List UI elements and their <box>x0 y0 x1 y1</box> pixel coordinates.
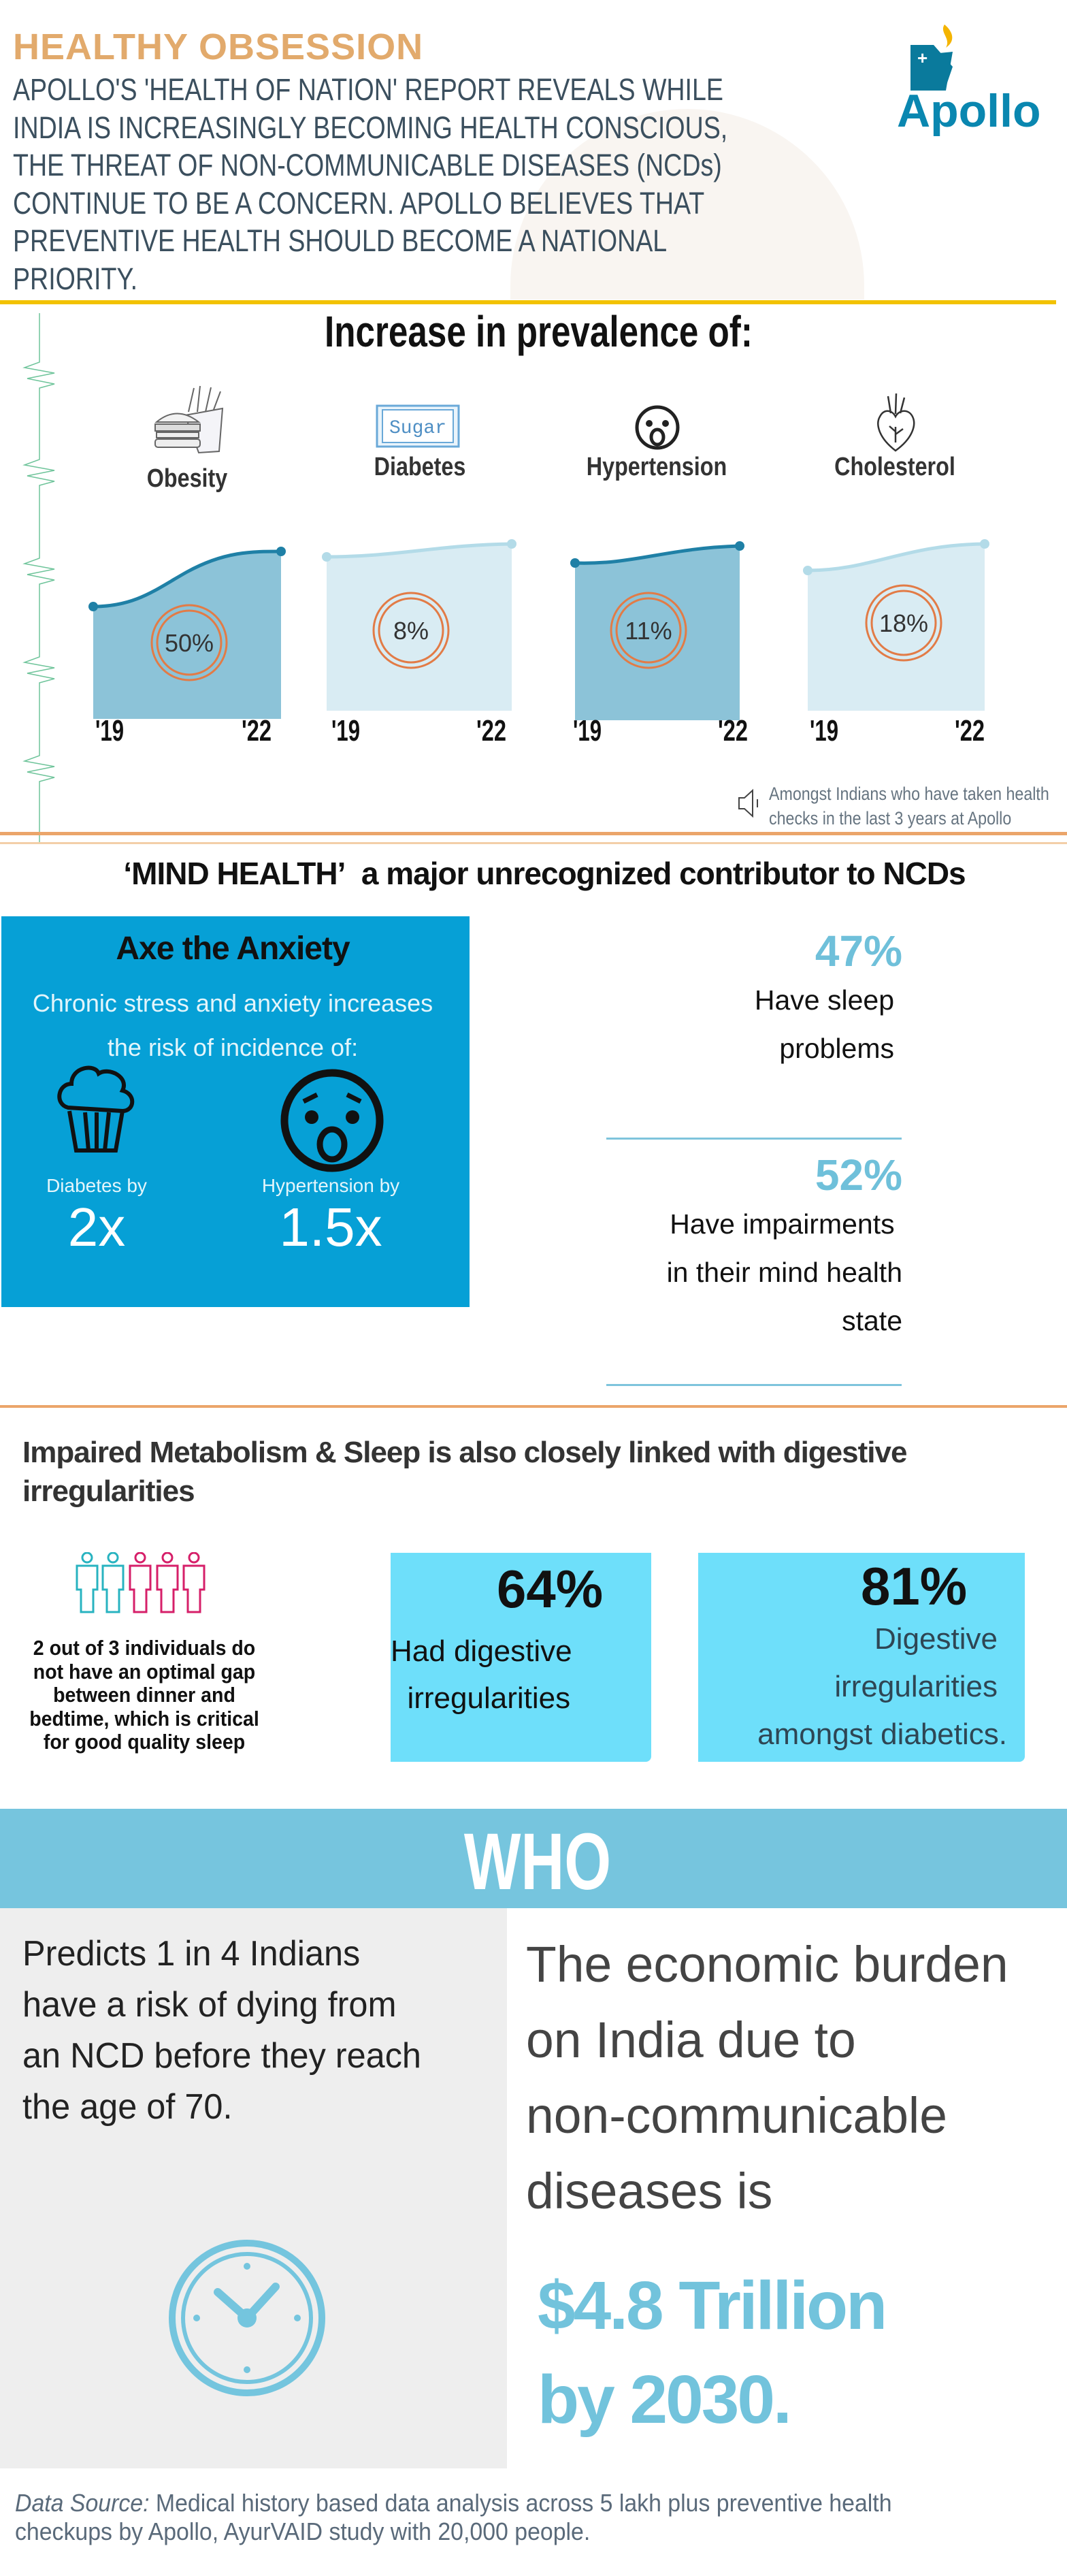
stat: 47% sleep: Have sleep <box>755 984 894 1016</box>
banner: WHO <box>0 1809 1067 1908</box>
stat: 52% mind health: in their mind health <box>667 1257 902 1288</box>
chart: area charts: '22 <box>242 714 272 747</box>
stat: 52% mind health <box>667 1150 902 1336</box>
panel text: the risk of incidence of: <box>108 1033 358 1061</box>
panel: WHO prediction: an NCD before they reach <box>22 2036 421 2076</box>
banner: WHO: WHO <box>464 1817 611 1907</box>
stat: $4.8 trillion <box>538 2268 885 2438</box>
stat: $4.8 trillion: by 2030. <box>538 2362 790 2438</box>
note <box>769 784 1049 828</box>
label: diabetes: Diabetes <box>374 453 465 481</box>
caption: 2 out of 3: 2 out of 3 individuals do <box>33 1636 255 1660</box>
caption: 2 out of 3: not have an optimal gap <box>33 1660 255 1683</box>
chart: area charts <box>88 539 989 747</box>
chart: area charts: '22 <box>718 714 748 747</box>
stat: hypertension 1.5x: Hypertension by <box>262 1175 399 1196</box>
panel: 64%: Had digestive <box>391 1635 572 1668</box>
chart: area charts: '22 <box>955 714 985 747</box>
footer: data source <box>15 2489 892 2545</box>
text: economic burden <box>526 1936 1008 2219</box>
panel: WHO prediction: Predicts 1 in 4 Indians <box>22 1934 360 1974</box>
intro paragraph: PRIORITY. <box>13 261 137 295</box>
panel: 81%: Digestive <box>874 1622 998 1656</box>
logo: Apollo <box>897 25 1041 136</box>
caption: 2 out of 3: bedtime, which is critical <box>29 1706 259 1730</box>
panel: 81% <box>698 1553 1025 1762</box>
stat: 52% mind health: Have impairments <box>670 1208 895 1240</box>
caption: 2 out of 3 <box>29 1636 259 1754</box>
caption: 2 out of 3: between dinner and <box>53 1683 235 1707</box>
icon: sugar: Sugar <box>389 418 446 439</box>
header background silhouette <box>510 109 864 300</box>
chart: area charts: 8% <box>393 617 429 645</box>
stat: hypertension 1.5x: 1.5x <box>279 1197 382 1257</box>
icon: muffin <box>57 1066 135 1153</box>
ekg line <box>22 313 54 842</box>
title: HEALTHY OBSESSION <box>13 27 423 67</box>
stat: 47% sleep <box>755 927 902 1064</box>
label: obesity: Obesity <box>147 464 227 493</box>
icon: heart <box>877 393 915 452</box>
label: hypertension: Hypertension <box>587 453 727 481</box>
heading: impaired metabolism <box>22 1436 906 1508</box>
orange dividers <box>0 832 1067 835</box>
chart: area charts: '19 <box>95 714 124 747</box>
chart: area charts: '22 <box>476 714 506 747</box>
note: Amongst Indians who have taken health <box>769 784 1049 804</box>
panel: WHO prediction <box>0 1908 507 2468</box>
chart: area charts: '19 <box>331 714 360 747</box>
intro paragraph: CONTINUE TO BE A CONCERN. APOLLO BELIEVES THAT <box>13 185 704 221</box>
stat: hypertension 1.5x <box>262 1175 399 1257</box>
note: checks in the last 3 years at Apollo <box>769 808 1011 828</box>
icon: people <box>76 1552 206 1613</box>
panel text <box>33 989 433 1061</box>
caption: 2 out of 3: for good quality sleep <box>44 1730 245 1754</box>
icon: clock <box>169 2240 325 2396</box>
icon: burger and fries <box>154 385 223 453</box>
intro paragraph: THE THREAT OF NON-COMMUNICABLE DISEASES (NCDs) <box>13 148 722 182</box>
panel text: Chronic stress and anxiety increases <box>33 989 433 1017</box>
intro paragraph <box>13 72 727 295</box>
chart: area charts: 11% <box>625 617 672 645</box>
chart: area charts: '19 <box>573 714 602 747</box>
logo: Apollo: Apollo <box>897 85 1041 136</box>
text: economic burden: The economic burden <box>526 1936 1008 1993</box>
footer: data source: Data Source: Medical history based data analysis across 5 lakh plus preventive health <box>15 2489 892 2517</box>
panel: 81%: irregularities <box>834 1670 998 1703</box>
yellow divider <box>0 300 1056 304</box>
text: economic burden: non-communicable <box>526 2087 947 2144</box>
icon: sugar <box>376 404 460 448</box>
panel: axe the anxiety <box>1 916 470 1307</box>
heading: mind health: ‘MIND HEALTH’ a major unrecognized contributor to NCDs <box>123 856 966 891</box>
chart: area charts: 50% <box>165 629 214 657</box>
chart: area charts: 18% <box>879 609 928 637</box>
heading: increase in prevalence: Increase in prevalence of: <box>325 307 753 356</box>
stat: diabetes 2x: Diabetes by <box>46 1175 147 1196</box>
logo: Apollo: + <box>917 48 928 68</box>
icon: speaker <box>738 788 758 818</box>
intro paragraph: APOLLO'S 'HEALTH OF NATION' REPORT REVEALS WHILE <box>13 72 723 107</box>
intro paragraph: INDIA IS INCREASINGLY BECOMING HEALTH CONSCIOUS, <box>13 110 727 144</box>
text: economic burden: on India due to <box>526 2012 856 2068</box>
footer: data source: checkups by Apollo, AyurVAID study with 20,000 people. <box>15 2517 590 2545</box>
panel: 81%: amongst diabetics. <box>757 1718 1007 1751</box>
label: cholesterol: Cholesterol <box>834 453 955 481</box>
panel: 64%: 64% <box>497 1559 603 1619</box>
stat: 52% mind health: state <box>842 1305 902 1336</box>
intro paragraph: PREVENTIVE HEALTH SHOULD BECOME A NATIONAL <box>13 223 667 258</box>
stat: diabetes 2x: 2x <box>68 1197 125 1257</box>
stat: 47% sleep: problems <box>779 1033 894 1064</box>
stat: diabetes 2x <box>46 1175 147 1257</box>
heading: impaired metabolism: Impaired Metabolism & Sleep is also closely linked with digestive <box>22 1436 906 1469</box>
orange divider <box>0 1405 1067 1408</box>
icon: shocked face <box>280 1069 384 1172</box>
stat: $4.8 trillion: $4.8 Trillion <box>538 2268 885 2344</box>
heading: impaired metabolism: irregularities <box>22 1475 195 1508</box>
stat: 52% mind health: 52% <box>815 1150 902 1200</box>
panel heading: Axe the Anxiety <box>116 931 350 967</box>
panel: 81%: 81% <box>861 1556 967 1616</box>
text: economic burden: diseases is <box>526 2163 772 2219</box>
panel: 64% <box>391 1553 651 1762</box>
panel: WHO prediction: have a risk of dying from <box>22 1985 396 2025</box>
chart: area charts: '19 <box>810 714 838 747</box>
stat: 47% sleep: 47% <box>815 927 902 976</box>
panel: 64%: irregularities <box>407 1681 570 1715</box>
panel: WHO prediction: the age of 70. <box>22 2087 233 2127</box>
icon: shocked face <box>636 406 679 449</box>
